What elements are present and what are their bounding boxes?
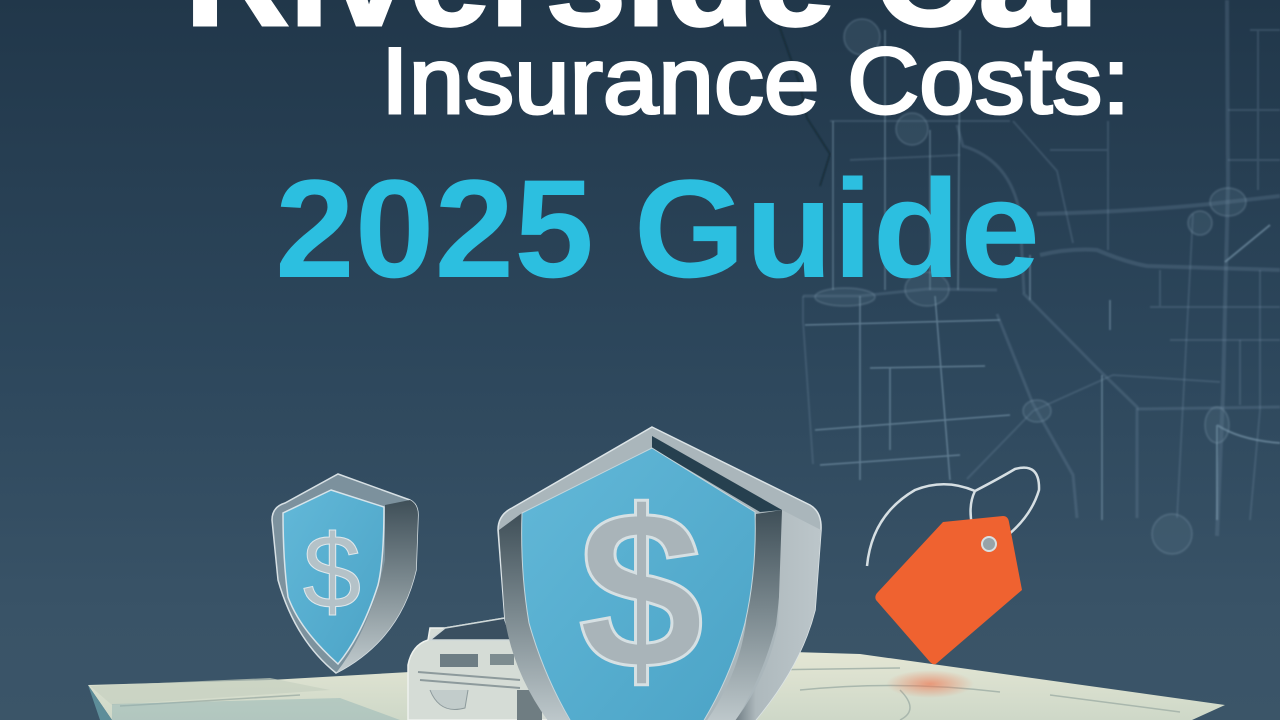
title line 3: 2025 Guide: 2025 Guide xyxy=(275,150,1040,307)
dollar sign: $ xyxy=(303,514,361,631)
tag eyelet xyxy=(982,537,996,551)
tag string xyxy=(867,468,1039,566)
dollar sign: $ xyxy=(578,463,704,716)
map highway markers xyxy=(815,19,1246,554)
icon: small shield with dollar xyxy=(272,474,418,673)
tag body xyxy=(875,516,1022,664)
map sheet xyxy=(88,652,1225,720)
background street map xyxy=(770,0,1280,536)
title line 2: Insurance Costs: xyxy=(381,28,1130,133)
map base xyxy=(88,652,1225,720)
icon: large shield with dollar xyxy=(498,427,821,720)
icon: orange price tag xyxy=(867,468,1039,664)
icon: car xyxy=(408,618,548,720)
